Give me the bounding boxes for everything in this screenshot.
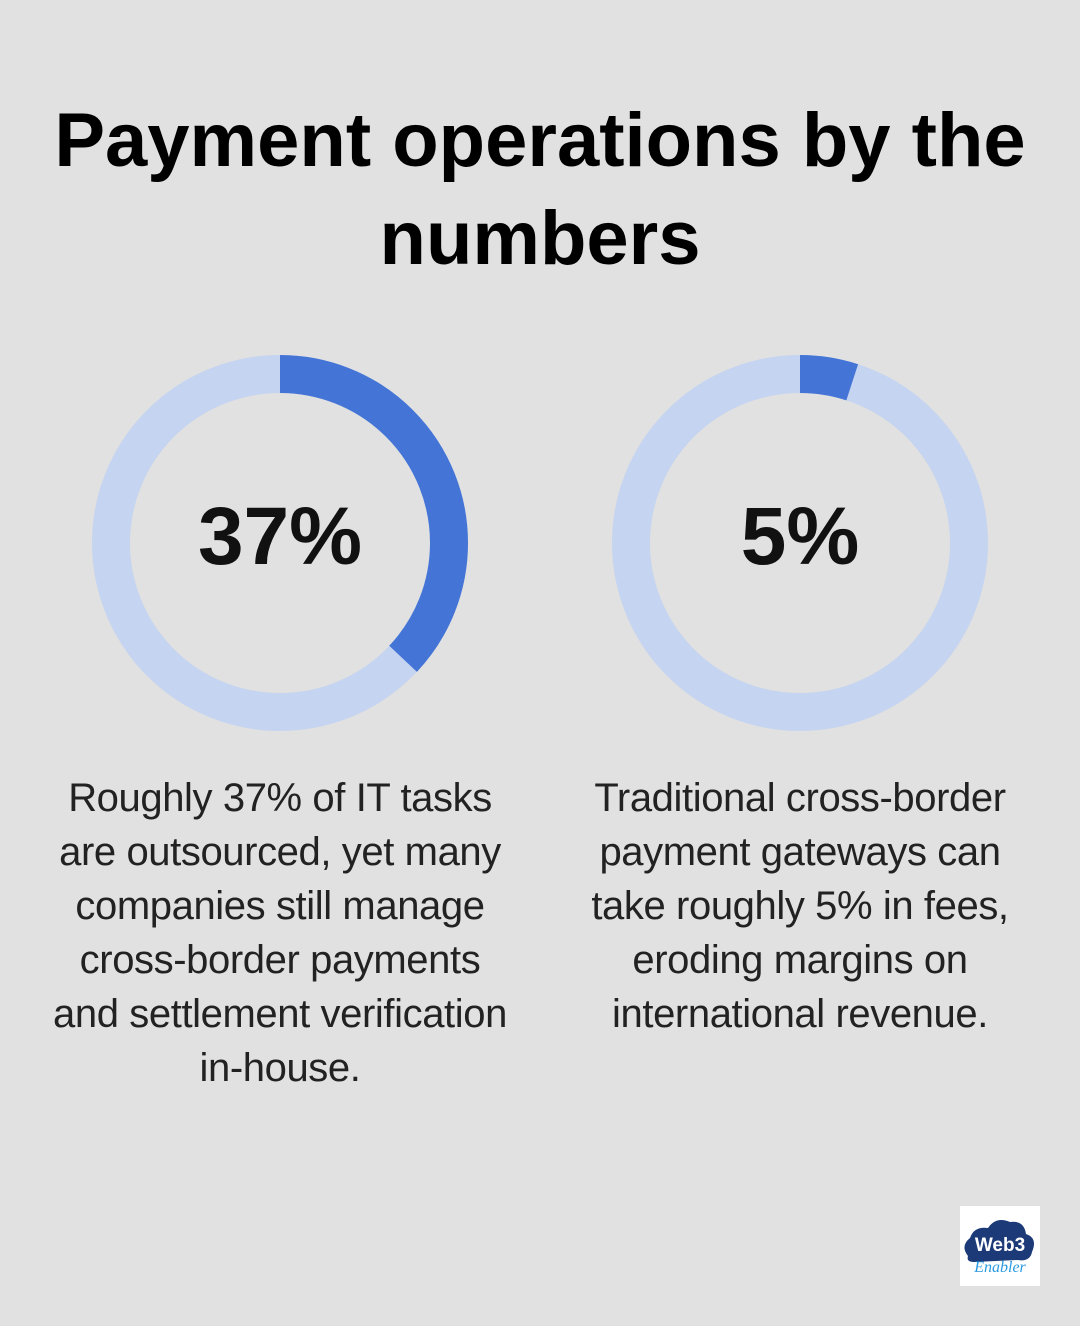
text block: 37% description: are outsourced, yet many — [59, 830, 501, 874]
title — [54, 98, 1026, 281]
text block: 37% description — [53, 776, 507, 1090]
donut: 37% — [92, 355, 468, 731]
text block: 37% description: cross-border payments — [80, 938, 480, 982]
logo: Web3 Enabler: Web3 — [975, 1235, 1025, 1256]
logo: Web3 Enabler: Enabler — [973, 1259, 1027, 1276]
text block: 5% description: take roughly 5% in fees, — [591, 884, 1009, 928]
title: numbers — [380, 196, 700, 281]
text block: 5% description: Traditional cross-border — [594, 776, 1006, 820]
text block: 37% description: Roughly 37% of IT tasks — [68, 776, 492, 820]
text block: 5% description — [591, 776, 1009, 1036]
donut: 5% — [612, 355, 988, 731]
stat number: 37%: 37% — [198, 491, 362, 582]
text block: 5% description: international revenue. — [612, 992, 988, 1036]
text block: 37% description: companies still manage — [75, 884, 485, 928]
text block: 5% description: payment gateways can — [599, 830, 1001, 874]
title: Payment operations by the — [54, 98, 1026, 183]
stat number: 5%: 5% — [741, 491, 859, 582]
text block: 5% description: eroding margins on — [632, 938, 968, 982]
text block: 37% description: in-house. — [200, 1046, 360, 1090]
logo: Web3 Enabler — [960, 1206, 1040, 1286]
text block: 37% description: and settlement verification — [53, 992, 507, 1036]
